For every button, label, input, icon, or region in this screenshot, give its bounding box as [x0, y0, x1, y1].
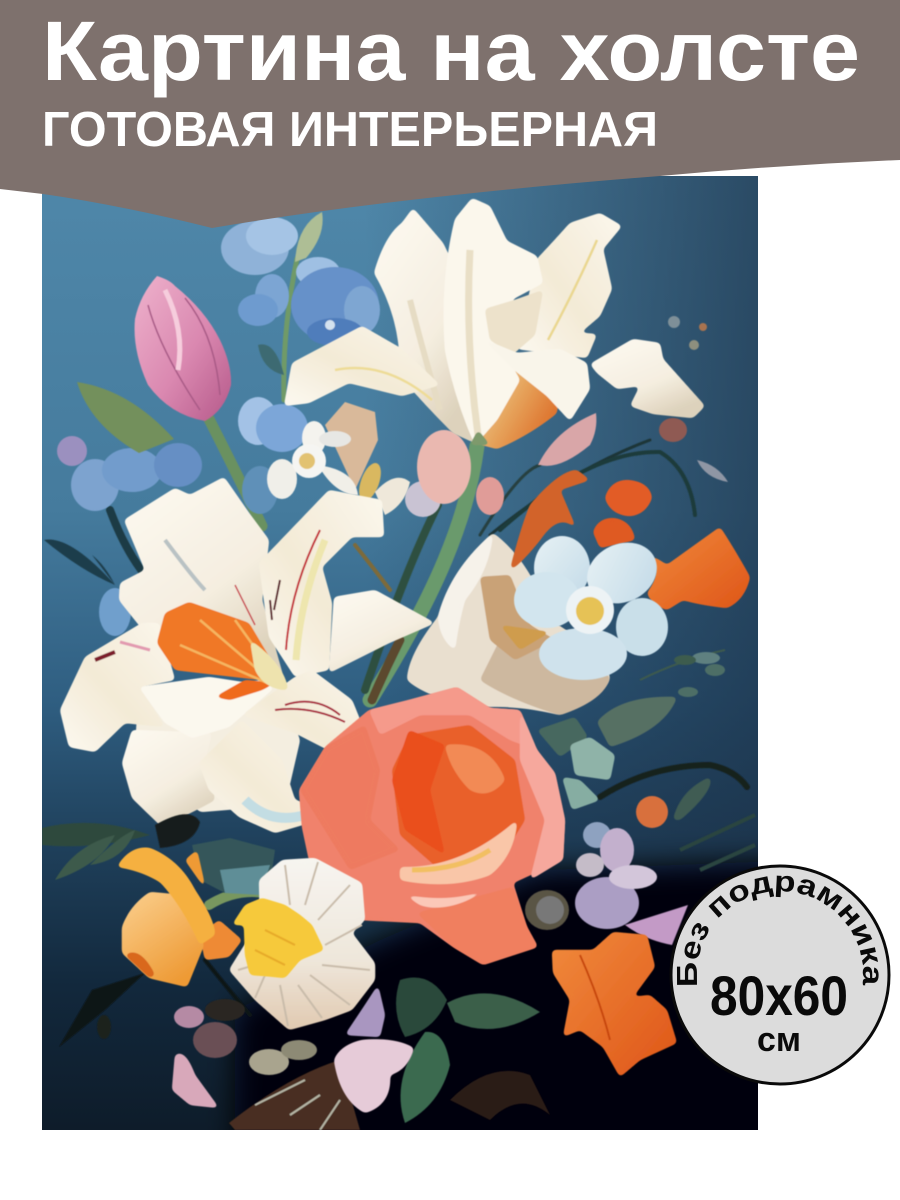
lower right curled petal: [264, 672, 360, 749]
lilac flowers: [525, 822, 688, 945]
badge unit: см: [757, 1021, 801, 1059]
mid petal: [139, 677, 275, 738]
upper right petal: [517, 213, 622, 358]
yellow tulip: [117, 848, 242, 987]
yellow flower: [232, 898, 324, 978]
lily body fill: [135, 680, 300, 812]
pink tulip: [135, 276, 231, 421]
pale pink flower bottom: [172, 985, 414, 1113]
title: Картина на холсте: [42, 4, 860, 98]
dark leaves left: [42, 814, 275, 1047]
white daisy: [229, 858, 375, 1030]
painting background: [42, 176, 758, 1130]
orange flower bottom right: [552, 932, 677, 1077]
left lower petal: [284, 326, 440, 406]
pink blossom centre: [405, 316, 728, 517]
teal leaves right: [537, 650, 755, 870]
badge: size: [670, 864, 890, 1086]
lower right petal: [204, 742, 302, 834]
far right petal: [590, 339, 705, 418]
green bud top: [295, 212, 323, 262]
orange throat: [482, 370, 558, 450]
teal leaf: [258, 344, 284, 375]
orange buds: [510, 470, 652, 570]
blue flower middle: [238, 397, 308, 514]
orange stamens: [156, 602, 268, 680]
upper left petals: [374, 208, 475, 443]
badge arc text: Без подрамника: [676, 876, 879, 986]
top right petal: [259, 490, 384, 677]
orange tulip right: [647, 527, 750, 610]
pale blue flower: [514, 532, 668, 680]
blue flowers left: [57, 436, 202, 636]
lower left petal: [122, 730, 215, 827]
left petal: [60, 623, 175, 752]
subtitle: ГОТОВАЯ ИНТЕРЬЕРНАЯ: [42, 103, 658, 157]
green leaf left: [77, 382, 174, 453]
blue flowers top: [221, 217, 380, 346]
dark leaves left: [44, 540, 115, 585]
dark foliage bottom: [193, 978, 550, 1130]
lower front petal: [499, 346, 591, 420]
inner shadow: [485, 290, 543, 354]
upper left petal: [119, 477, 285, 683]
coral rose: [299, 687, 565, 965]
badge size number: 80x60: [710, 964, 848, 1027]
centre petal: [444, 198, 543, 445]
painting: floral bouquet on blue: [42, 176, 758, 1130]
header banner: [0, 0, 900, 228]
peony behind: [407, 533, 610, 715]
white lily top: [284, 198, 705, 449]
right petal: [329, 590, 435, 673]
stems: [110, 259, 747, 1015]
small white flower: [267, 402, 410, 515]
big white lily: [60, 477, 435, 833]
